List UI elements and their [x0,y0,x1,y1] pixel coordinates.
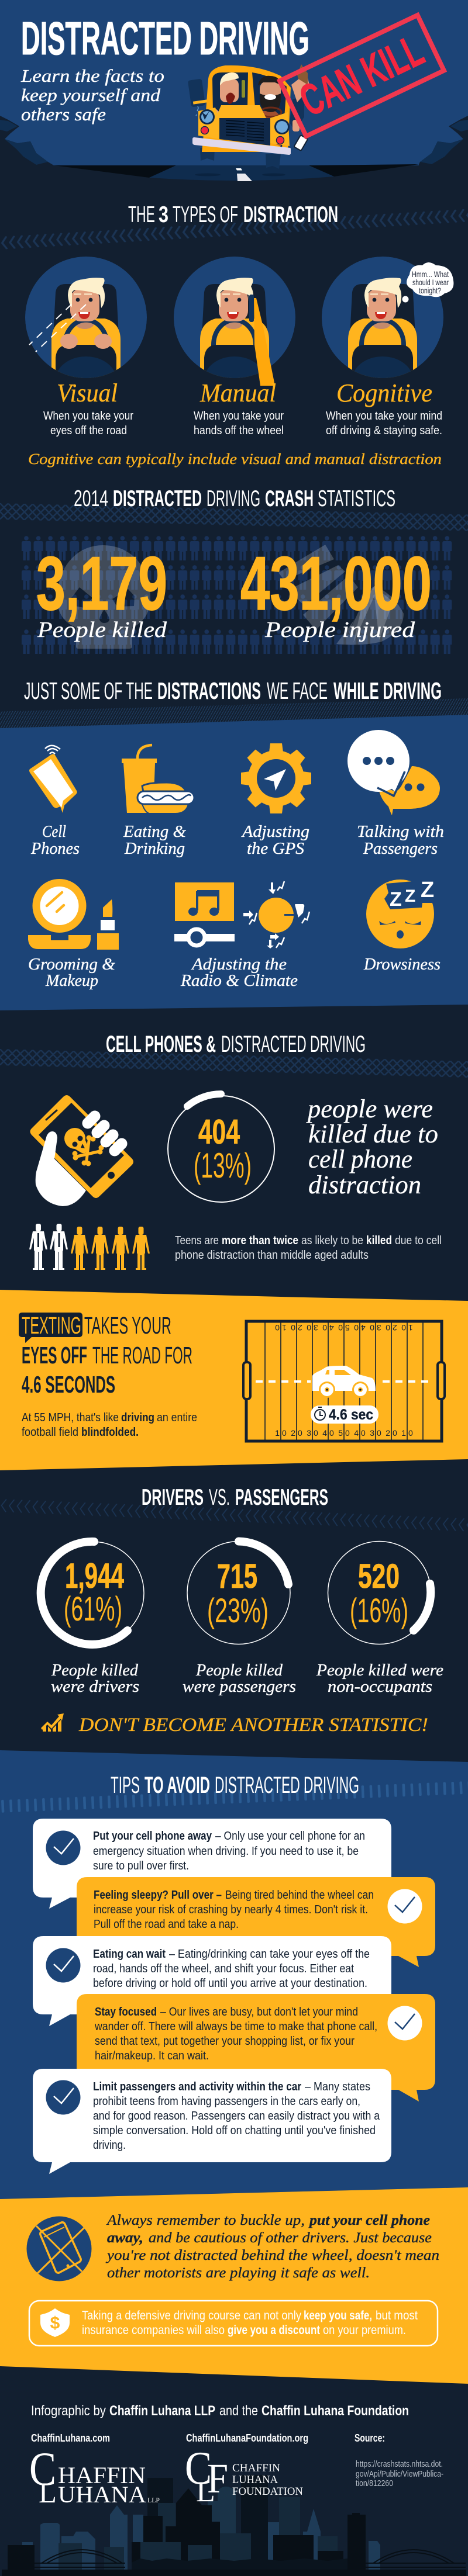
text: always remember to buckle up [105,2213,439,2281]
skull and crossbones [64,1128,104,1166]
logo: chaffin luhana foundation: L [196,2475,215,2508]
text: killed due to cell phone distraction: cell phone [308,1145,412,1173]
item: adjusting the gps [241,743,311,858]
heading: crash statistics [74,486,395,511]
icon: car [312,1366,376,1398]
timer badge: 4.6 sec [329,1407,373,1423]
panel: visual distraction [25,257,147,437]
labels: people killed groups: were drivers [51,1678,139,1696]
credits: websites and source: ChaffinLuhana.com [31,2432,110,2444]
subtitle [20,65,164,124]
description [43,410,133,437]
thought bubble: tonight? [419,286,441,295]
tip: stay focused: hair/makeup. It can wait. [95,2049,209,2062]
panel: cognitive distraction [322,257,453,437]
credits: websites and source [31,2432,385,2444]
text: always remember to buckle up: and be cautious of other drivers. Just because [149,2230,432,2246]
yard numbers: 10 [275,1428,289,1438]
credits: infographic by: Chaffin Luhana Foundation [261,2403,409,2419]
tip: limit passengers: prohibit teens from having passengers in the cars early on, [93,2095,360,2108]
tip: stay focused: – Our lives are busy, but don't let your mind [160,2006,358,2018]
heading: distractions we face: JUST SOME OF THE [24,677,153,704]
logo: chaffin luhana foundation: C [185,2443,212,2494]
chart: drivers 61 percent: (61%) [64,1590,122,1628]
labels: people killed groups: were passengers [183,1678,296,1696]
heading: drivers vs passengers: PASSENGERS [235,1485,328,1510]
icon: speech bubbles [347,730,440,815]
heading: crash statistics: STATISTICS [318,486,395,511]
credits: websites and source: ChaffinLuhanaFoundation.org [186,2432,308,2444]
label: Passengers [363,840,438,858]
explanation text: football field [22,1425,78,1439]
callout: defensive driving course: keep you safe, [304,2309,372,2322]
logo: chaffin luhana: L [39,2476,57,2509]
credits: infographic by [31,2403,409,2419]
description: When you take your [194,410,284,423]
logo: chaffin luhana foundation: CHAFFIN [232,2462,280,2474]
heading: tips to avoid distracted driving: TIPS [111,1772,140,1798]
item: eating and drinking [122,745,194,858]
icon: sleeping face: Z [405,887,415,906]
text: teens twice as likely: due to cell [395,1234,442,1247]
logo: chaffin luhana: C [29,2442,56,2495]
item: talking with passengers [347,730,444,858]
heading: the 3 types of distraction: 3 [159,202,168,227]
passenger leaning out [290,64,310,131]
logo: chaffin luhana: HAFFIN [58,2462,146,2488]
heading: drivers vs passengers: VS. [209,1485,230,1510]
item: drowsiness [363,878,441,974]
yard numbers: 40 [322,1428,336,1438]
timer badge [311,1405,378,1424]
headline: THE ROAD FOR [92,1342,192,1369]
headline: TAKES YOUR [84,1312,171,1339]
headline: EYES OFF [22,1342,87,1369]
headline: TEXTING [22,1312,81,1339]
callout: defensive driving course [29,2301,438,2346]
label [241,823,309,858]
note: cognitive includes visual and manual: Cognitive can typically include visual and manual distraction [28,451,442,468]
chart: drivers 61 percent [41,1542,144,1644]
heading: the 3 types of distraction: THE [128,202,155,227]
text: killed due to cell phone distraction: people were [306,1095,433,1123]
yard numbers: 50 [338,1428,352,1438]
skyline [2,2475,466,2576]
tip: eating can wait: before driving or hold off until you arrive at your destination. [93,1977,367,1990]
text: teens twice as likely: Teens are [175,1234,219,1247]
description: hands off the wheel [194,424,284,437]
logo: chaffin luhana: UHANA [58,2481,146,2508]
tip: limit passengers [33,2069,391,2174]
description: eyes off the road [50,424,127,437]
icon: shield with dollar: $ [50,2314,60,2333]
yard numbers: 10 [399,1323,413,1332]
explanation text: At 55 MPH, that's like [22,1411,119,1424]
credits: infographic by: Chaffin Luhana LLP [109,2403,215,2419]
logo: chaffin luhana: LLP [147,2496,160,2504]
chart: passengers 23 percent: 715 [217,1557,257,1595]
description: When you take your [43,410,133,423]
tip: limit passengers: simple conversation. Hold off on chatting until you've finished [93,2124,376,2137]
description [194,410,284,437]
stat: people killed: People killed [37,618,167,642]
icon: adults and teens [29,1224,150,1270]
tip: eating can wait: road, hands off the wheel, and shift your focus. Either eat [93,1962,354,1975]
chart: 13 percent ring: (13%) [194,1146,252,1185]
text: teens twice as likely: as likely to be [301,1234,363,1247]
labels: people killed groups: People killed [195,1661,283,1680]
driver with beard [256,76,282,146]
heading: tips to avoid distracted driving [111,1772,359,1798]
heading: distractions we face [24,677,442,704]
icon: rising chart [41,1713,64,1732]
text: killed due to cell phone distraction [306,1095,438,1199]
credits: websites and source: Source: [355,2432,385,2444]
credits: infographic by: Infographic by [31,2403,106,2419]
heading: the 3 types of distraction: TYPES OF [173,202,238,227]
label [180,955,298,990]
icon: sleeping face [366,878,436,948]
chart: non-occupants 16 percent: 520 [358,1557,400,1595]
text: always remember to buckle up: other motorists are playing it safe as well. [107,2265,370,2281]
description: off driving & staying safe. [326,424,442,437]
tire track 3 [0,1049,468,1078]
icon: gear with navigation arrow [241,743,311,813]
text: killed due to cell phone distraction: distraction [308,1171,421,1199]
tip: put your cell phone away: – Only use your cell phone for an [215,1830,365,1843]
chart: passengers 23 percent: (23%) [207,1592,269,1630]
label [357,823,444,858]
yard numbers: 20 [386,1428,400,1438]
heading: the 3 types of distraction [128,202,338,227]
heading: distractions we face: WE FACE [267,677,328,704]
people rows background [20,536,453,654]
explanation text: blindfolded. [81,1425,139,1439]
heading: cell phones and distracted driving: CELL PHONES & [106,1031,216,1057]
stat: people killed: 3,179 [36,541,167,626]
tire track 1 [0,208,468,250]
yard numbers: 30 [370,1428,384,1438]
stat: people injured: People injured [264,618,415,642]
text: teens twice as likely: phone distraction than middle aged adults [175,1248,369,1262]
tire track 5 [0,1781,468,1813]
text: always remember to buckle up: you're not distracted behind the wheel, doesn't mean [105,2248,439,2263]
source url: gov/Api/Public/ViewPublica- [356,2469,443,2479]
tip: limit passengers: driving. [93,2139,126,2152]
icon: drink and hot dog burger [122,745,194,813]
text: killed due to cell phone distraction: killed due to [308,1120,438,1148]
source url: https://crashstats.nhtsa.dot. [356,2459,443,2469]
football field diagram [243,1321,445,1441]
yard numbers: 20 [288,1323,302,1332]
yard numbers: 40 [354,1428,368,1438]
label: Manual [199,379,276,407]
subtitle: Learn the facts to [20,65,164,86]
label: Cell [42,823,66,841]
tip: eating can wait: Eating can wait [93,1948,166,1961]
subtitle: others safe [21,104,106,124]
chart: drivers 61 percent: 1,944 [65,1556,124,1595]
label [123,823,186,858]
tire track 2 [0,503,468,531]
icon: phone with wifi [29,746,77,813]
school bus illustration [188,64,310,169]
text: always remember to buckle up: away, [107,2230,143,2246]
callout: defensive driving course: Taking a defensive driving course can not only [82,2309,301,2322]
icon: cognitive driver [322,257,453,403]
passenger with bottle [213,72,246,129]
explanation text [22,1411,197,1439]
tip: eating can wait [33,1936,391,2026]
icon: compact mirror and lipstick [28,879,119,950]
item: adjusting the radio and climate [174,881,309,990]
icon: hand holding phone with skull [30,1095,133,1206]
yard numbers: 40 [320,1323,334,1332]
heading: distractions we face: DISTRACTIONS [157,677,261,704]
callout: don't become another statistic: DON'T BECOME ANOTHER STATISTIC! [78,1715,428,1736]
description [326,410,442,437]
text: teens twice as likely [175,1234,442,1262]
thought bubble [402,262,453,303]
heading: crash statistics: DISTRACTED [113,486,202,511]
callout: defensive driving course: insurance companies will also [82,2324,225,2337]
icon: tire watermark [278,545,404,645]
label: Makeup [45,972,98,990]
heading: drivers vs passengers: DRIVERS [142,1485,204,1510]
callout: defensive driving course: give you a discount [228,2324,320,2337]
chart: passengers 23 percent [187,1542,290,1644]
headline [22,1312,192,1398]
icon: sleeping face: Z [421,878,434,902]
explanation text: an entire [157,1411,197,1424]
icon: manual driver [174,257,295,403]
source url [356,2459,443,2488]
yard numbers: 30 [304,1323,318,1332]
tip: stay focused [77,1994,435,2101]
yard numbers: 30 [307,1428,321,1438]
logo: chaffin luhana [29,2442,160,2509]
source url: tion/812260 [356,2478,393,2488]
label: Drinking [124,840,185,858]
callout: defensive driving course: on your premium. [323,2324,406,2337]
label: Cognitive [336,379,432,407]
icon: shield with dollar [40,2308,70,2337]
hatched band [0,698,468,728]
label: Visual [57,379,118,407]
tip: put your cell phone away [33,1819,391,1909]
icon: music and slider [174,882,235,946]
label: Radio & Climate [180,972,298,990]
tip: put your cell phone away: emergency situation when driving. If you need to use it, be [93,1845,359,1858]
heading: drivers vs passengers [142,1485,328,1510]
chart: 13 percent ring [168,1094,274,1202]
heading: cell phones and distracted driving: DISTRACTED DRIVING [221,1031,366,1057]
text: teens twice as likely: more than twice [222,1234,298,1247]
explanation text: driving [121,1411,154,1424]
icon: sleeping face: Z [390,888,402,910]
logo: chaffin luhana foundation: FOUNDATION [232,2485,303,2498]
tip: feeling sleepy: Feeling sleepy? Pull over – [94,1889,222,1902]
headline: 4.6 SECONDS [22,1371,115,1398]
text: teens twice as likely: killed [366,1234,392,1247]
tip: feeling sleepy: Being tired behind the wheel can [225,1889,374,1902]
labels: people killed groups: People killed were [316,1661,443,1680]
labels: people killed groups: People killed [51,1661,139,1680]
tip: put your cell phone away: sure to pull over first. [93,1860,189,1872]
icon: climate dial [243,881,309,948]
stamp: can kill [280,15,444,136]
tire track 4 [0,1499,468,1532]
icon: no phone [27,2216,91,2281]
yard numbers: 20 [291,1428,305,1438]
label [28,955,115,990]
tip: feeling sleepy: increase your risk of crashing by nearly 4 times. Don't risk it. [94,1903,368,1916]
chart: 13 percent ring: 404 [198,1113,240,1151]
speech bubble tag [19,1313,82,1343]
yard numbers: 50 [336,1323,350,1332]
stat: people killed [36,541,167,642]
tip: stay focused: Stay focused [95,2006,157,2018]
tip: feeling sleepy: Pull off the road and take a nap. [94,1918,239,1931]
tip: limit passengers: and for good reason. Passengers can easily distract you with a [93,2110,380,2123]
panel: manual distraction [174,257,295,437]
tip: stay focused: send that text, put together your shopping list, or fix your [95,2035,355,2048]
label: the GPS [247,840,304,858]
tip: limit passengers: – Many states [305,2080,370,2093]
heading: crash statistics: DRIVING [207,486,260,511]
text: always remember to buckle up: Always remember to buckle up, [106,2213,305,2228]
credits: infographic by: and the [219,2403,258,2419]
text: always remember to buckle up: put your cell phone [308,2213,430,2228]
description: When you take your mind [326,410,442,423]
heading: tips to avoid distracted driving: DISTRACTED DRIVING [215,1772,359,1798]
label: Eating & [123,823,186,841]
label: Adjusting [241,823,309,841]
yard numbers: 10 [273,1323,287,1332]
logo: chaffin luhana foundation: F [207,2455,228,2502]
header scenery: trees and road [0,116,468,181]
label: Phones [30,840,80,858]
tip: eating can wait: – Eating/drinking can take your eyes off the [169,1948,370,1961]
tip: feeling sleepy [77,1877,435,1967]
heading: crash statistics: 2014 [74,486,108,511]
label [30,823,80,858]
label: Adjusting the [191,955,287,974]
heading: tips to avoid distracted driving: TO AVOID [144,1772,210,1798]
logo: chaffin luhana foundation: LUHANA [232,2474,278,2486]
item: cell phones [29,746,80,858]
labels: people killed groups [51,1661,443,1696]
tip: limit passengers: Limit passengers and activity within the car [93,2080,301,2093]
yard numbers: 10 [401,1428,415,1438]
chart: non-occupants 16 percent [328,1542,431,1644]
panel: texting takes your eyes off the road [19,1312,197,1439]
heading: the 3 types of distraction: DISTRACTION [243,202,338,227]
icon: skull watermark [57,545,150,649]
label: Drowsiness [363,955,441,974]
label: Grooming & [28,955,115,974]
yard numbers: 30 [367,1323,381,1332]
heading: crash statistics: CRASH [265,486,314,511]
tip: put your cell phone away: Put your cell phone away [93,1830,212,1843]
item: grooming and makeup [28,879,119,990]
thought bubble: Hmm... What [412,269,449,279]
labels: people killed groups: non-occupants [328,1678,432,1696]
yard numbers: 20 [383,1323,397,1332]
yard numbers: 40 [352,1323,366,1332]
subtitle: keep yourself and [21,85,161,105]
logo: chaffin luhana foundation [185,2443,303,2508]
tip: stay focused: wander off. There will always be time to make that phone call, [94,2020,377,2033]
icon: visual driver [25,257,147,403]
yard numbers [273,1323,415,1438]
thought bubble: should I wear [412,278,449,287]
chart: non-occupants 16 percent: (16%) [350,1592,408,1630]
label: Talking with [357,823,444,841]
callout: defensive driving course: but most [376,2309,418,2322]
bridges [35,2550,466,2567]
